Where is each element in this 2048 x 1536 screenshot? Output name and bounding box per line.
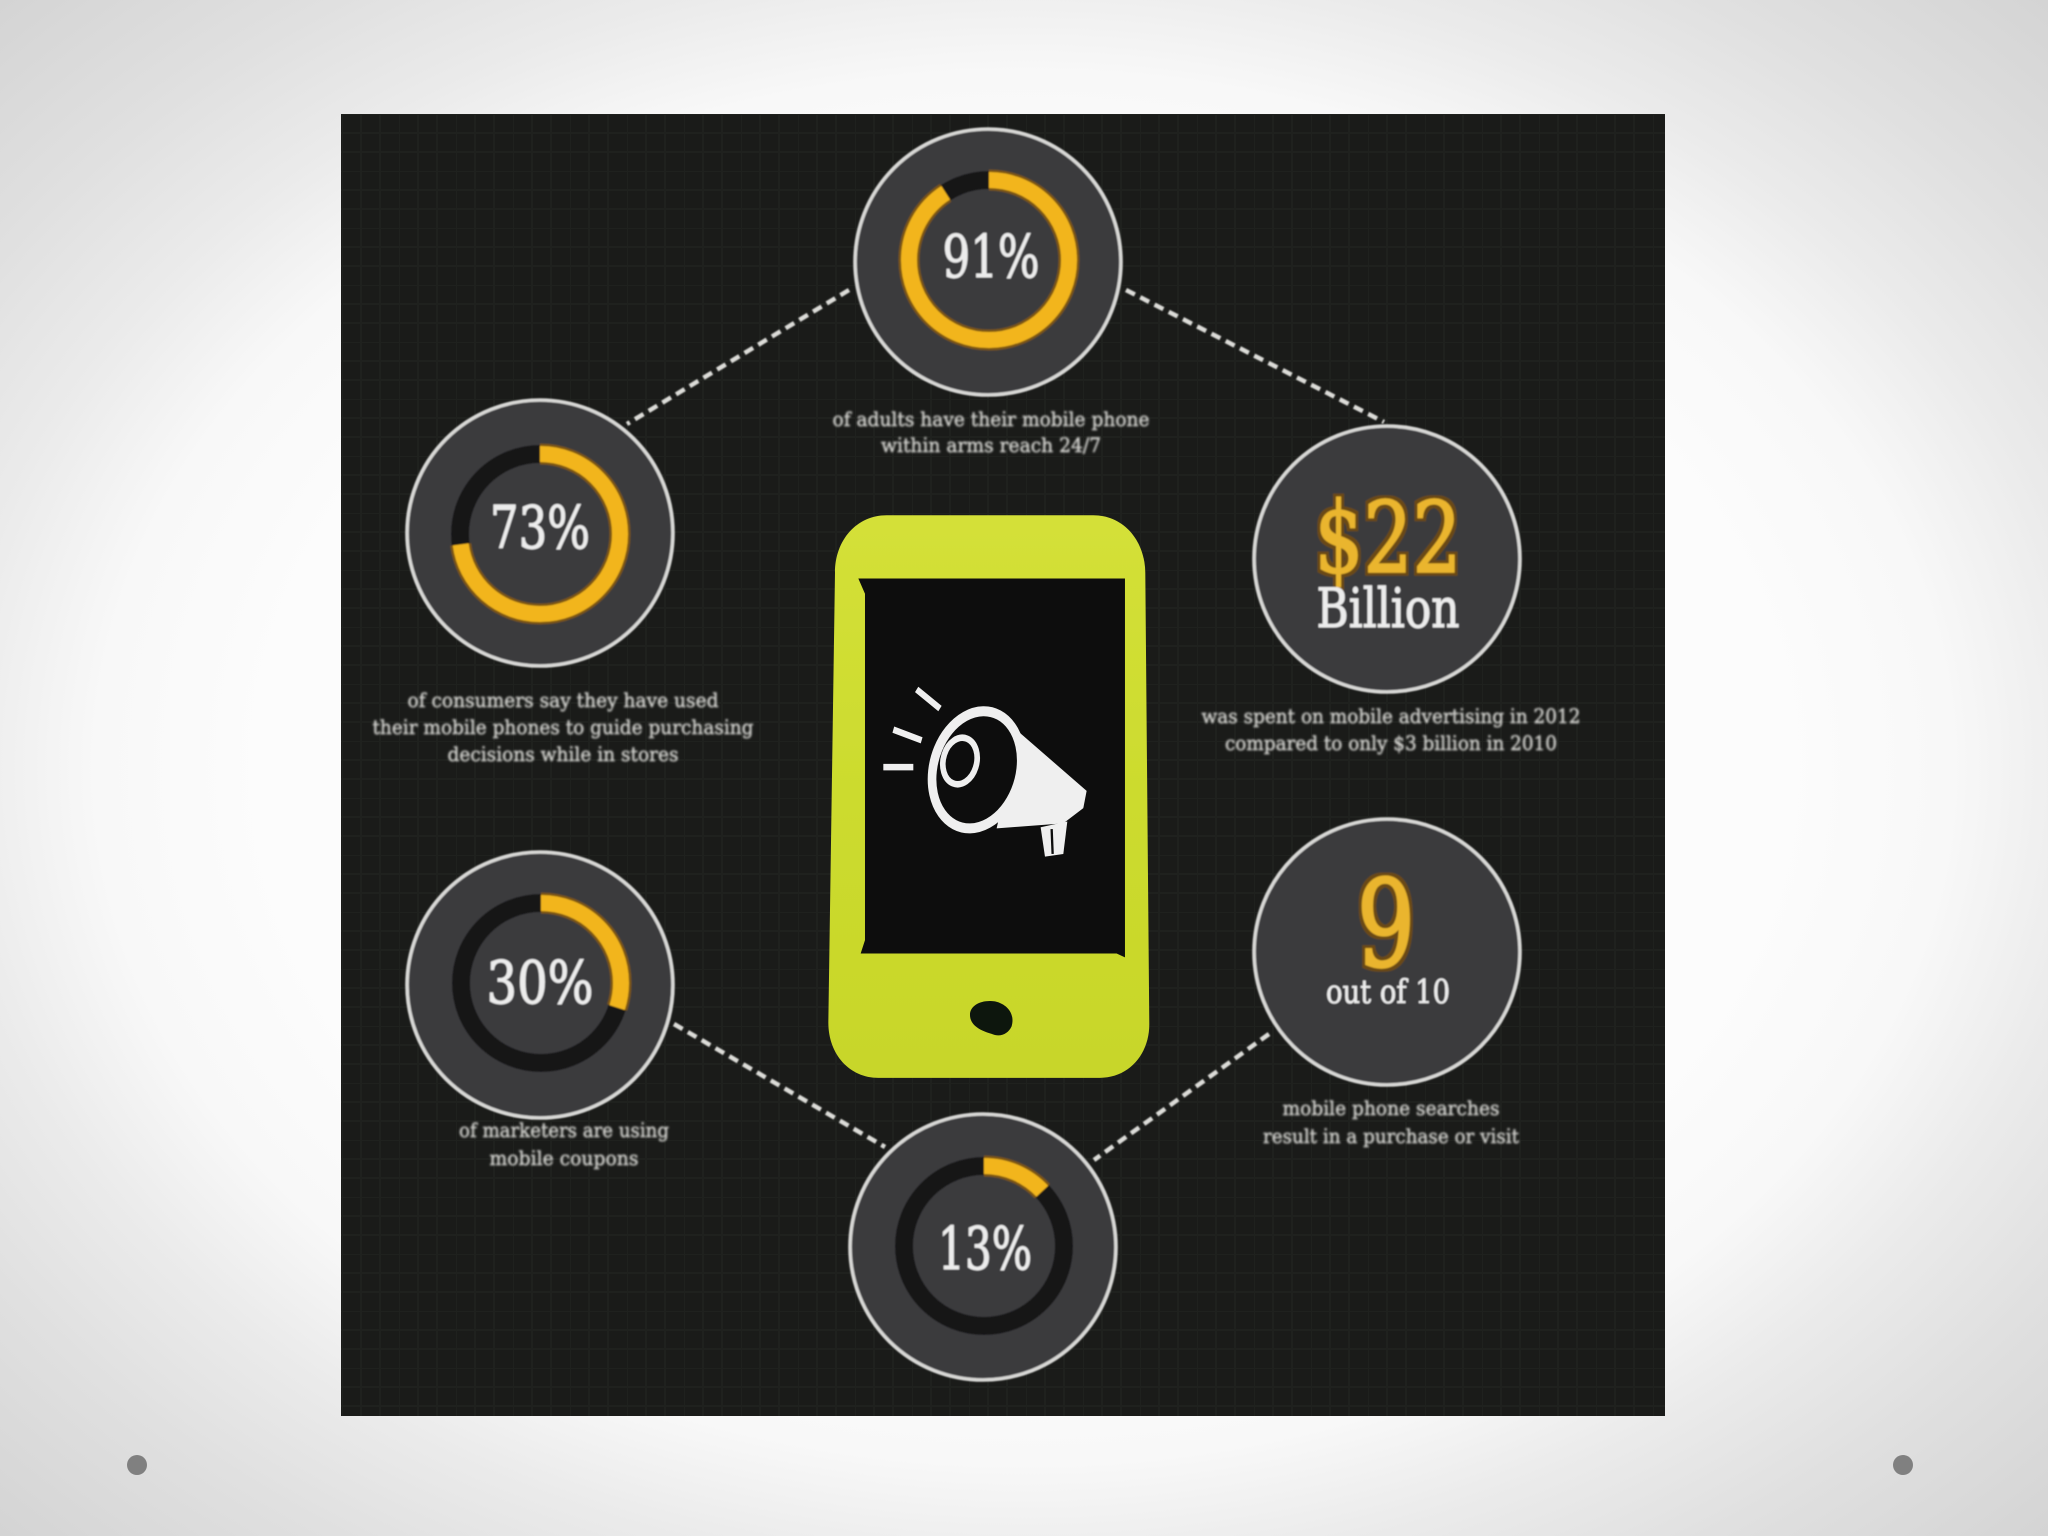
- stat: 30 percent: 30%: [486, 948, 594, 1017]
- phone body: [828, 515, 1149, 1078]
- caption: 9 out of 10: result in a purchase or visit: [1263, 1124, 1519, 1148]
- caption: 73 percent: decisions while in stores: [448, 742, 678, 766]
- stat: 9 out of 10: [1254, 819, 1520, 1085]
- caption: 91 percent: within arms reach 24/7: [881, 433, 1101, 457]
- caption: 91 percent: of adults have their mobile phone: [832, 407, 1150, 431]
- stat: 9 out of 10: 9: [1357, 856, 1415, 995]
- bullet dot right: [1893, 1455, 1913, 1475]
- home button: [970, 1001, 1012, 1035]
- panel: dark infographic background: [341, 114, 1665, 1416]
- caption: 22 billion dollars: was spent on mobile advertising in 2012: [1202, 704, 1580, 728]
- stat: 91 percent: [855, 129, 1121, 395]
- caption: 30 percent: of marketers are using: [459, 1118, 669, 1142]
- caption: 30 percent: mobile coupons: [490, 1146, 638, 1170]
- stat: 9 out of 10: out of 10: [1326, 972, 1450, 1011]
- stat: 22 billion dollars: Billion: [1316, 577, 1460, 640]
- phone illustration: [828, 515, 1149, 1078]
- stat: 13 percent: [850, 1114, 1116, 1380]
- stat: 91 percent: 91%: [942, 222, 1040, 291]
- caption: 9 out of 10: mobile phone searches: [1282, 1096, 1500, 1120]
- stat: 22 billion dollars: $22: [1314, 482, 1462, 596]
- caption: 9 out of 10: [1263, 1096, 1519, 1148]
- caption: 73 percent: [372, 688, 754, 766]
- stat: 73 percent: 73%: [490, 493, 590, 562]
- caption: 73 percent: of consumers say they have used: [408, 688, 719, 712]
- caption: 30 percent: [459, 1118, 669, 1170]
- caption: 22 billion dollars: [1202, 704, 1580, 755]
- phone screen: [858, 578, 1125, 957]
- caption: 73 percent: their mobile phones to guide purchasing: [372, 715, 754, 739]
- caption: 22 billion dollars: compared to only $3 billion in 2010: [1225, 731, 1557, 755]
- bullet dot left: [127, 1455, 147, 1475]
- stat: 13 percent: 13%: [938, 1214, 1032, 1283]
- icon: megaphone: [883, 689, 1087, 857]
- stat: 22 billion dollars: [1254, 426, 1520, 692]
- caption: 91 percent: [832, 407, 1150, 457]
- stat: 30 percent: [407, 852, 673, 1118]
- stat: 73 percent: [407, 400, 673, 666]
- connector lines: [627, 290, 1384, 1160]
